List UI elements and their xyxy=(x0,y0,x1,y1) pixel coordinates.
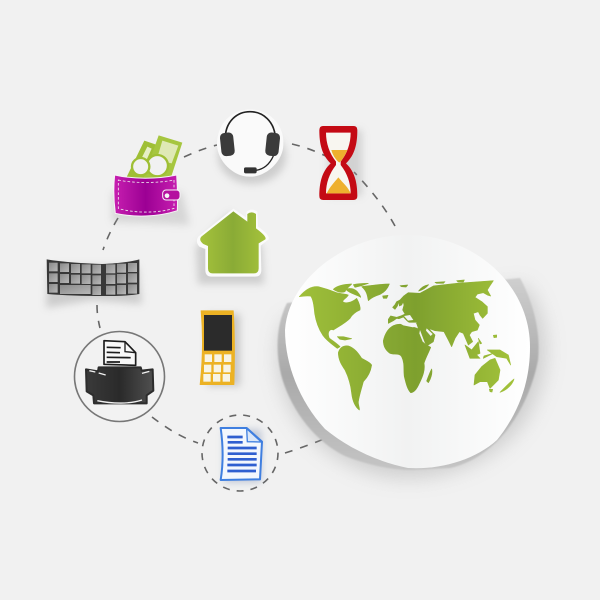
arctic islands xyxy=(419,285,429,291)
hourglass shadow xyxy=(328,130,362,196)
madagascar xyxy=(427,369,432,383)
document shadow xyxy=(224,430,261,482)
icon: headset xyxy=(217,109,286,184)
greenland xyxy=(362,284,389,301)
south america xyxy=(338,346,372,410)
icon: wallet with banknotes xyxy=(112,135,190,225)
north america xyxy=(299,287,360,348)
icon: foldable keyboard xyxy=(46,259,142,308)
headset shadow xyxy=(218,128,286,184)
world map xyxy=(299,280,514,410)
house shadow xyxy=(196,212,264,284)
dashed connector ring xyxy=(97,144,395,453)
icon: mobile phone xyxy=(200,311,240,386)
eurasia xyxy=(388,281,493,347)
icon: house xyxy=(196,209,269,284)
inland seas xyxy=(395,315,433,345)
printer paper xyxy=(104,341,136,365)
wallet body xyxy=(114,175,178,216)
sticker rim xyxy=(278,278,539,470)
icon: document in dashed circle xyxy=(202,415,278,491)
printer body xyxy=(86,367,153,403)
banknotes xyxy=(126,135,182,178)
wallet shadow xyxy=(112,192,190,225)
sticker shadow xyxy=(278,285,546,478)
printer ring xyxy=(74,332,164,422)
southeast asia islands xyxy=(465,345,480,358)
icon: hourglass xyxy=(319,126,362,200)
sticker disc xyxy=(285,235,530,468)
phone shadow xyxy=(208,314,240,386)
scandinavia and british isles xyxy=(393,300,400,309)
australia xyxy=(474,358,500,388)
icon: printer in circle xyxy=(74,332,164,422)
keyboard shadow xyxy=(46,266,142,308)
africa xyxy=(383,324,431,393)
document dashed ring xyxy=(202,415,278,491)
panel: world map sticker xyxy=(278,235,546,478)
